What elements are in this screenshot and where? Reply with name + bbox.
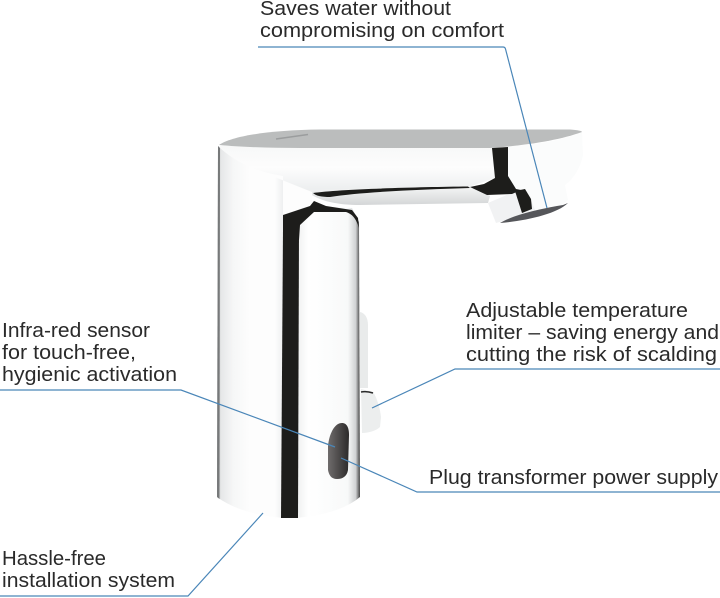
- faucet: gray top plate: [219, 130, 582, 148]
- text: temperature limiter: limiter – saving energy and: [466, 322, 719, 344]
- faucet: temperature limiter plate: [360, 312, 368, 388]
- leader line: saves water: [258, 47, 547, 208]
- faucet: long dark column stripe: [281, 230, 299, 518]
- faucet: dark slit under spout: [313, 186, 470, 197]
- faucet: temperature limiter knob: [361, 389, 381, 433]
- leader line: power supply: [341, 458, 720, 492]
- text: power supply: Plug transformer power supply: [429, 467, 718, 489]
- faucet: nozzle: [488, 191, 536, 223]
- text: saves water: compromising on comfort: [260, 20, 504, 42]
- leader line: infra-red sensor: [0, 390, 335, 447]
- icon: infra-red sensor window: [328, 423, 349, 479]
- text: installation: installation system: [2, 570, 175, 592]
- faucet: spout body: [219, 146, 495, 193]
- text: temperature limiter: [466, 300, 719, 366]
- leader line: installation: [0, 513, 263, 596]
- text: temperature limiter: cutting the risk of scalding: [466, 344, 717, 366]
- faucet: underside of spout: [305, 186, 490, 205]
- faucet: right spout gloss: [505, 132, 583, 213]
- faucet: nozzle dark band: [515, 189, 532, 213]
- faucet: column left side: [217, 146, 283, 518]
- faucet: limiter knob dark line: [361, 392, 373, 393]
- faucet: left edge shading: [217, 146, 220, 499]
- faucet: neck blend: [262, 172, 312, 216]
- leader line: temperature limiter: [372, 369, 720, 408]
- text: infra-red sensor: [2, 320, 177, 386]
- faucet: collar reflection at column top: [283, 201, 359, 240]
- text: installation: Hassle-free: [2, 548, 106, 570]
- text: infra-red sensor: Infra-red sensor: [2, 320, 150, 342]
- text: infra-red sensor: hygienic activation: [2, 364, 177, 386]
- faucet: dark reflection on spout: [470, 147, 521, 195]
- faucet: aerator opening: [500, 203, 568, 223]
- faucet illustration: [217, 130, 583, 518]
- text: temperature limiter: Adjustable temperature: [466, 300, 688, 322]
- faucet: column right side: [296, 205, 360, 518]
- text: infra-red sensor: for touch-free,: [2, 342, 136, 364]
- text: installation: [2, 548, 175, 592]
- text: saves water: [260, 0, 504, 42]
- faucet: logo mark on top plate: [276, 134, 308, 139]
